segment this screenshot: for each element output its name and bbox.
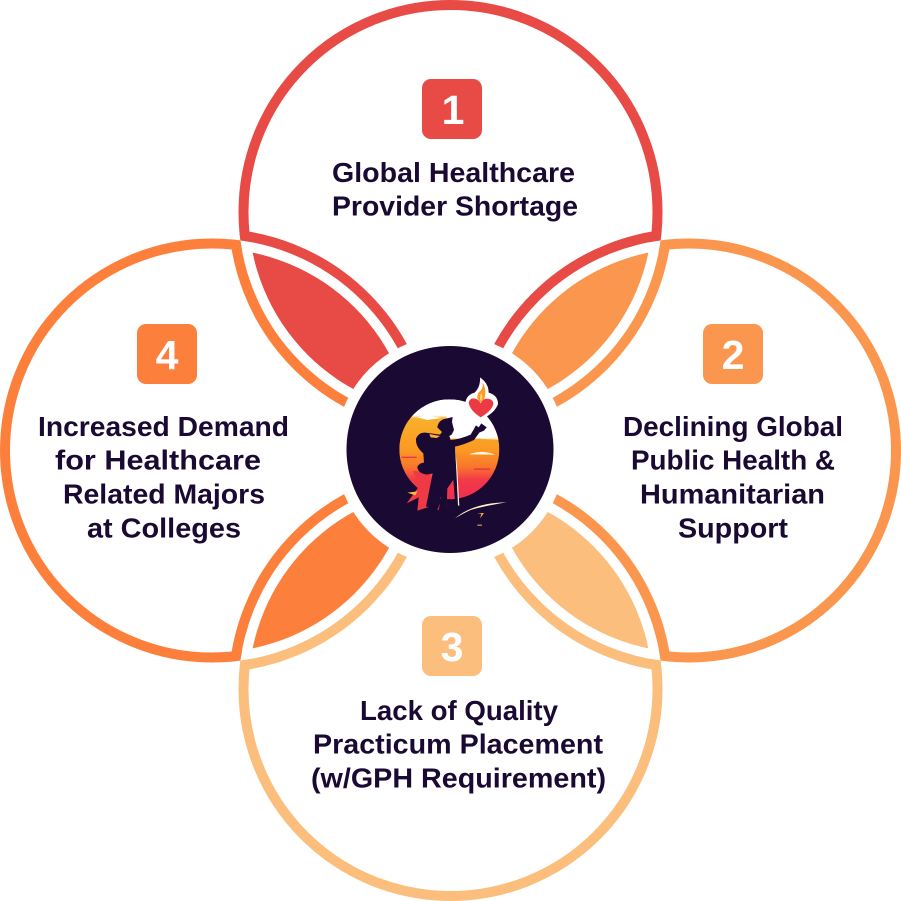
heading: Increased Demand for Healthcare Related Majors at Colleges [38, 411, 289, 544]
center logo badge [346, 346, 554, 553]
ground swoosh [455, 502, 507, 518]
sun with sunset gradient [399, 399, 500, 499]
heading: Lack of Quality Practicum Placement (w/GPH Requirement): Practicum Placement [313, 728, 603, 760]
center white halo [336, 336, 566, 566]
number 3: 3 [441, 624, 463, 670]
heading: Declining Global Public Health & Humanitarian Support: Public Health & [631, 444, 835, 476]
heading: Increased Demand for Healthcare Related Majors at Colleges: at Colleges [87, 512, 241, 544]
number badge 1 [422, 79, 482, 139]
block: item 1 [332, 79, 578, 222]
number 4: 4 [156, 332, 179, 378]
number 1: 1 [442, 87, 464, 133]
number badge 3 [422, 616, 482, 676]
heading: Declining Global Public Health & Humanitarian Support: Support [678, 512, 788, 544]
heading: Increased Demand for Healthcare Related Majors at Colleges: Increased Demand [38, 411, 289, 442]
panel: circle 3 ring and overlap, light orange [0, 234, 901, 896]
hiker silhouette [416, 417, 487, 510]
heading: Lack of Quality Practicum Placement (w/GPH Requirement) [311, 695, 606, 794]
icon: flaming heart [465, 377, 498, 420]
panel: circle 1 ring and overlap, red [0, 5, 901, 668]
block: item 2 [623, 324, 843, 544]
panel: circle 2 ring and overlap, orange [234, 0, 896, 901]
block: item 3 [311, 616, 606, 794]
number 2: 2 [722, 332, 744, 378]
heading: Global Healthcare Provider Shortage: Provider Shortage [332, 190, 578, 222]
block: item 4 [38, 324, 289, 544]
heading: Declining Global Public Health & Humanitarian Support [623, 411, 843, 544]
heading: Increased Demand for Healthcare Related Majors at Colleges: Related Majors [63, 478, 265, 510]
panel: circle 4 ring and overlap, deep orange [5, 0, 668, 901]
icon: hiker reaching for a flaming heart [399, 377, 507, 526]
heading: Lack of Quality Practicum Placement (w/GPH Requirement): (w/GPH Requirement) [311, 762, 606, 794]
heading: Lack of Quality Practicum Placement (w/GPH Requirement): Lack of Quality [360, 695, 559, 726]
rock shards [407, 471, 434, 511]
heading: Global Healthcare Provider Shortage [332, 157, 578, 222]
heading: Global Healthcare Provider Shortage: Global Healthcare [332, 157, 575, 188]
heading: Declining Global Public Health & Humanitarian Support: Declining Global [623, 411, 843, 442]
heading: Increased Demand for Healthcare Related Majors at Colleges: for Healthcare [55, 444, 261, 476]
number badge 2 [703, 324, 763, 384]
number badge 4 [137, 324, 197, 384]
heading: Declining Global Public Health & Humanitarian Support: Humanitarian [640, 478, 825, 510]
